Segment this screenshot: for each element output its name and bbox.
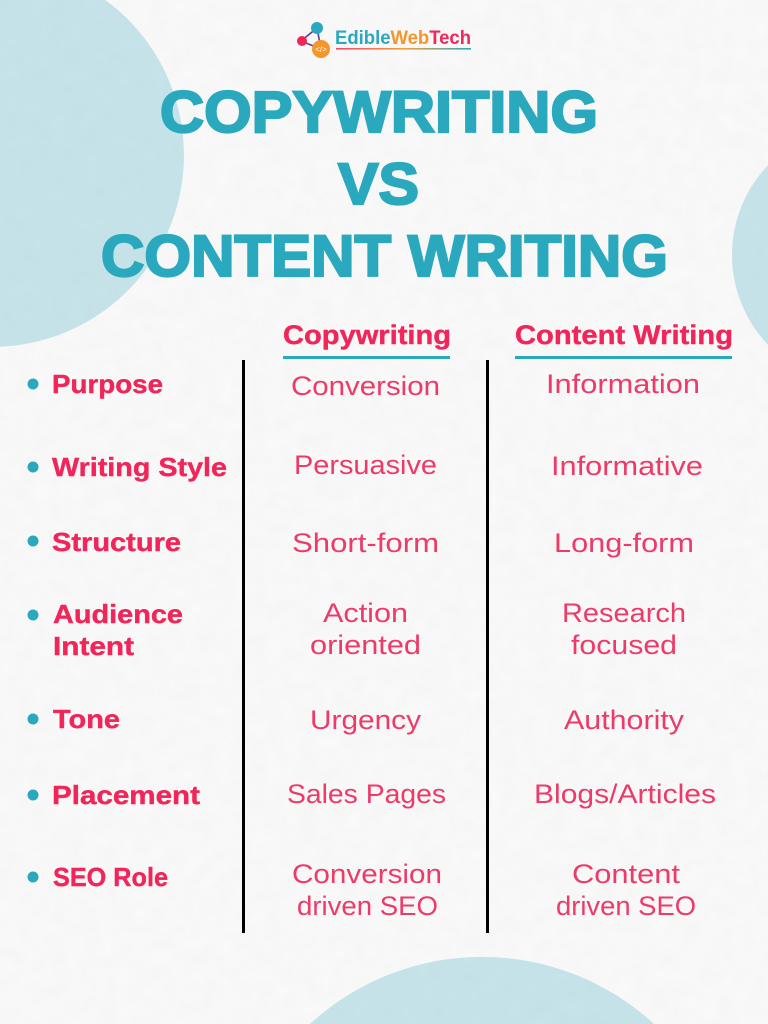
row: Purpose: Information [546, 369, 700, 399]
column heading: Content Writing: Content Writing [515, 320, 733, 350]
row: Writing Style [28, 450, 703, 482]
row: Structure: Structure [52, 527, 181, 557]
row: Audience Intent: Intent [53, 631, 134, 661]
row: Writing Style: Writing Style [52, 452, 227, 482]
row: Audience Intent: Audience [53, 599, 183, 629]
row: SEO Role: Content [572, 859, 681, 889]
row: Audience Intent: oriented [310, 630, 421, 660]
row: Placement: Placement [52, 780, 200, 810]
row: Tone [28, 704, 685, 735]
divider: left vertical line [242, 360, 245, 933]
title: VS [338, 152, 419, 217]
row: Audience Intent: Research [562, 598, 686, 628]
row: Tone: Authority [564, 705, 685, 735]
row: Purpose [28, 369, 700, 401]
row: Writing Style: Persuasive [294, 450, 437, 480]
title: COPYWRITING [160, 80, 598, 145]
row: Purpose: Purpose [52, 369, 163, 399]
row: Writing Style: Informative [551, 451, 703, 481]
row: SEO Role [28, 859, 696, 921]
title [101, 80, 668, 289]
row: Structure [28, 527, 694, 558]
logo: EdibleWebTech [297, 22, 471, 58]
row: Purpose: Conversion [291, 371, 440, 401]
decorative circle: bottom [310, 957, 654, 1024]
row: Audience Intent: focused [571, 630, 677, 660]
row: Audience Intent [28, 598, 686, 661]
title: CONTENT WRITING [101, 224, 668, 289]
logo underline [336, 48, 471, 50]
icon: logo network [297, 22, 330, 58]
row: Placement: Sales Pages [287, 779, 446, 809]
decorative circle: top left [0, 0, 184, 347]
row: SEO Role: driven SEO [297, 891, 438, 921]
row: SEO Role: driven SEO [556, 891, 696, 921]
row: Audience Intent: Action [323, 598, 408, 628]
icon: logo network: </> [315, 45, 327, 54]
row: Tone: Urgency [310, 705, 422, 735]
logo wordmark: EdibleWebTech [335, 28, 471, 49]
column heading: Copywriting: Copywriting [283, 320, 451, 350]
divider: right vertical line [486, 360, 489, 933]
row: Placement [28, 779, 716, 810]
row: Structure: Short-form [292, 528, 439, 558]
row: SEO Role: SEO Role [53, 862, 168, 892]
decorative circle: right [732, 165, 768, 345]
row: Structure: Long-form [554, 528, 694, 558]
row: Placement: Blogs/Articles [534, 779, 716, 809]
row: Tone: Tone [53, 704, 120, 734]
row: SEO Role: Conversion [292, 859, 442, 889]
